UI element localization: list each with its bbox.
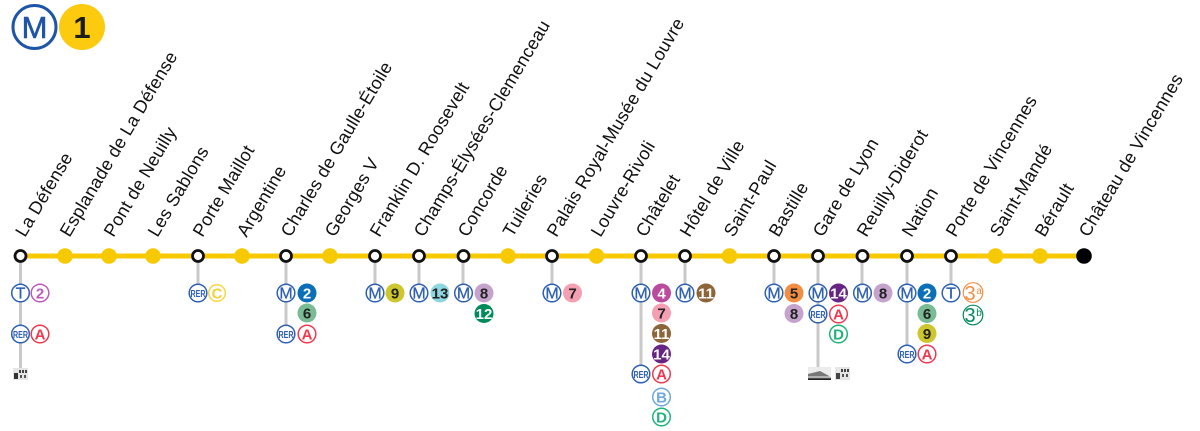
correspondances: Champs-Élysées-Clemenceau: M — [412, 286, 426, 302]
station names: Saint-Mandé — [986, 140, 1056, 240]
correspondances: Châtelet: 11 — [654, 326, 669, 343]
station names: Gare de Lyon — [809, 135, 883, 240]
correspondances: Nation: 6 — [923, 306, 931, 323]
correspondances: Reuilly-Diderot: M — [856, 286, 869, 302]
correspondances: Nation: RER — [900, 349, 915, 361]
correspondances: Porte de Vincennes: 3 — [964, 305, 976, 327]
connectors — [20, 256, 951, 374]
station names: Porte Maillot — [189, 142, 258, 240]
correspondances: La Défense: RER — [13, 329, 28, 341]
correspondances: Gare de Lyon — [809, 284, 848, 344]
correspondances: La Défense — [12, 284, 49, 344]
station names: Hôtel de Ville — [676, 137, 749, 240]
correspondances: Porte de Vincennes: a — [976, 286, 982, 297]
correspondances: Concorde: M — [457, 286, 470, 302]
correspondances: Bastille — [765, 284, 804, 323]
correspondances: Châtelet: M — [634, 286, 648, 302]
station names: Georges V — [321, 154, 383, 240]
line 1 track — [20, 254, 1084, 258]
correspondances: Porte Maillot: RER — [190, 288, 206, 300]
correspondances: Châtelet: 4 — [657, 286, 666, 302]
correspondances: Nation: A — [922, 346, 933, 364]
correspondances: Concorde: 8 — [480, 286, 488, 302]
station names: Tuileries — [499, 170, 551, 240]
icon: bus La Défense — [13, 368, 28, 380]
correspondances: Charles de Gaulle-Étoile: A — [302, 326, 313, 344]
correspondances: Franklin D. Roosevelt: M — [368, 286, 382, 302]
icon: train Gare de Lyon — [808, 367, 831, 380]
correspondances: Hôtel de Ville: 11 — [698, 286, 714, 302]
correspondances: Nation: 9 — [923, 326, 931, 343]
correspondances: Charles de Gaulle-Étoile — [277, 284, 316, 344]
logo: metro line 1: 1 — [73, 10, 91, 45]
correspondances: Nation: M — [900, 286, 914, 302]
correspondances: Champs-Élysées-Clemenceau — [410, 284, 450, 302]
correspondances: Porte Maillot — [189, 284, 225, 302]
correspondances: Gare de Lyon: 14 — [830, 286, 847, 302]
correspondances: Concorde — [455, 284, 494, 323]
correspondances: Palais Royal-Musée du Louvre: M — [545, 286, 559, 302]
correspondances: Nation — [898, 284, 936, 364]
correspondances: Bastille: M — [767, 286, 781, 302]
correspondances: Concorde: 12 — [476, 306, 492, 323]
correspondances: Porte Maillot: C — [212, 286, 223, 302]
station names: Franklin D. Roosevelt — [366, 78, 473, 240]
station names: Bérault — [1031, 180, 1078, 240]
correspondances: Palais Royal-Musée du Louvre — [543, 284, 582, 302]
correspondances: Gare de Lyon: A — [833, 306, 844, 324]
station names: Concorde — [454, 161, 512, 240]
correspondances: Porte de Vincennes: T — [946, 286, 956, 302]
correspondances: La Défense: 2 — [36, 286, 44, 302]
correspondances: Châtelet: RER — [634, 369, 649, 381]
station names: Nation — [898, 184, 942, 240]
correspondances: Gare de Lyon: M — [811, 286, 825, 302]
station names: Les Sablons — [144, 143, 213, 240]
correspondances: Châtelet: A — [656, 366, 667, 384]
correspondances: La Défense: A — [35, 326, 46, 344]
station names: Pont de Neuilly — [100, 123, 180, 240]
correspondances: Champs-Élysées-Clemenceau: 13 — [432, 286, 448, 302]
correspondances: Porte de Vincennes: 3 — [964, 283, 976, 305]
correspondances: Porte de Vincennes — [942, 283, 983, 327]
station names: Porte de Vincennes — [942, 92, 1041, 240]
correspondances: Reuilly-Diderot — [854, 284, 892, 302]
correspondances: Palais Royal-Musée du Louvre: 7 — [568, 286, 577, 302]
station names: Château de Vincennes — [1075, 70, 1187, 240]
correspondances: Charles de Gaulle-Étoile: 6 — [303, 306, 311, 322]
correspondances: Châtelet: 7 — [657, 306, 666, 322]
logo: metro line 1 — [13, 4, 105, 50]
correspondances: Châtelet: D — [656, 410, 667, 426]
station names: Saint-Paul — [720, 157, 780, 240]
station names: Esplanade de La Défense — [56, 48, 181, 240]
correspondances: Châtelet: B — [656, 390, 667, 406]
correspondances: Charles de Gaulle-Étoile: RER — [278, 329, 294, 341]
correspondances: Reuilly-Diderot: 8 — [879, 286, 887, 302]
correspondances: Nation: 2 — [923, 286, 931, 302]
correspondances: Châtelet: 14 — [653, 346, 670, 364]
correspondances: Hôtel de Ville: M — [678, 286, 692, 302]
station names: Argentine — [233, 162, 290, 240]
station names: Châtelet — [632, 171, 684, 240]
stations — [15, 248, 1092, 264]
correspondances: Gare de Lyon: RER — [810, 309, 826, 321]
correspondances: Porte de Vincennes: b — [976, 308, 982, 319]
station names: Champs-Élysées-Clemenceau — [410, 17, 554, 240]
station names: Palais Royal-Musée du Louvre — [543, 14, 688, 240]
icon: bus Gare de Lyon — [835, 367, 850, 380]
station names: Bastille — [765, 179, 812, 240]
station names: Reuilly-Diderot — [853, 126, 932, 240]
correspondances: La Défense: T — [16, 286, 26, 302]
correspondances: Gare de Lyon: D — [833, 326, 844, 344]
station names: Charles de Gaulle-Étoile — [277, 58, 396, 240]
station names — [11, 14, 1187, 240]
logo: metro line 1: M — [22, 10, 47, 45]
correspondances: Franklin D. Roosevelt — [366, 284, 404, 302]
correspondances: Hôtel de Ville — [676, 284, 716, 302]
station names: La Défense — [11, 149, 77, 240]
correspondances: Bastille: 8 — [790, 306, 798, 323]
correspondances: Bastille: 5 — [790, 286, 798, 302]
station names: Louvre-Rivoli — [587, 137, 659, 240]
correspondances: Charles de Gaulle-Étoile: M — [279, 286, 293, 302]
correspondances: Châtelet — [632, 284, 671, 426]
correspondances: Charles de Gaulle-Étoile: 2 — [303, 286, 311, 302]
correspondances: Franklin D. Roosevelt: 9 — [391, 286, 399, 302]
